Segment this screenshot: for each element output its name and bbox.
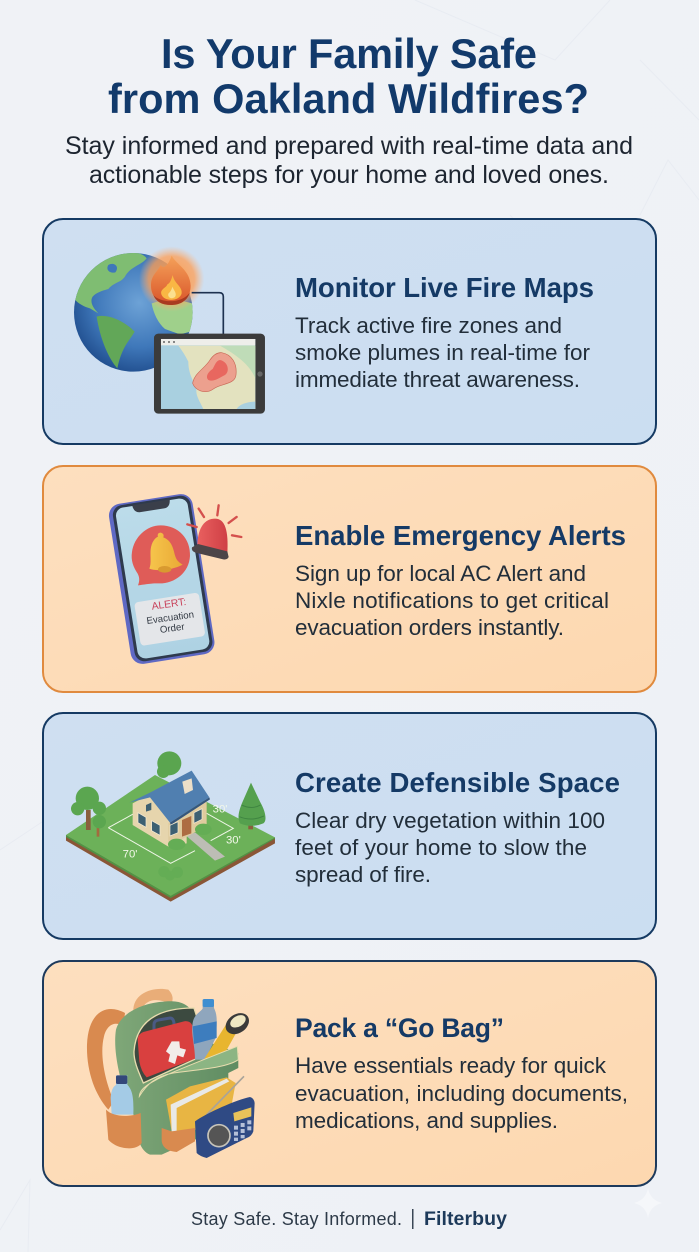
alert message text [146, 597, 195, 636]
body text: spread of fire. [295, 862, 431, 887]
body text [295, 561, 609, 640]
panel: monitor live fire maps [43, 219, 656, 444]
footer: Filterbuy [424, 1208, 507, 1230]
title: Is Your Family Safe [161, 30, 537, 77]
subtitle [65, 132, 633, 189]
subtitle: Stay informed and prepared with real-time data and [65, 132, 633, 160]
body text: feet of your home to slow the [295, 835, 587, 860]
body text: Have essentials ready for quick [295, 1053, 607, 1078]
footer: Stay Safe. Stay Informed. [191, 1209, 402, 1229]
heading: Create Defensible Space [295, 767, 620, 798]
heading: Enable Emergency Alerts [295, 520, 626, 551]
icon: backpack with emergency supplies [87, 989, 255, 1158]
body text: evacuation, including documents, [295, 1081, 628, 1106]
footer [191, 1208, 507, 1230]
body text: Sign up for local AC Alert and [295, 561, 586, 586]
measurement labels [123, 803, 241, 860]
body text: medications, and supplies. [295, 1108, 558, 1133]
body text: Track active fire zones and [295, 313, 562, 338]
alert message text: ALERT: [151, 597, 187, 613]
body text: smoke plumes in real-time for [295, 340, 590, 365]
measurement labels: 30' [226, 835, 241, 847]
subtitle: actionable steps for your home and loved ones. [89, 161, 609, 189]
body text: immediate threat awareness. [295, 367, 580, 392]
title [108, 30, 589, 122]
measurement labels: 30' [213, 803, 227, 815]
panel: create defensible space [43, 713, 656, 939]
icon: smartphone with bell alert and siren [107, 492, 241, 666]
panel: pack a go bag [43, 961, 656, 1186]
heading: Pack a “Go Bag” [295, 1013, 504, 1043]
body text: Nixle notifications to get critical [295, 588, 609, 613]
title: from Oakland Wildfires? [108, 75, 589, 122]
body text: Clear dry vegetation within 100 [295, 808, 605, 833]
alert message text: Order [159, 622, 186, 636]
alert message text: Evacuation [146, 609, 195, 627]
body text [295, 808, 605, 887]
body text [295, 313, 590, 392]
measurement labels: 70' [123, 848, 137, 860]
icon: globe with flame linked to tablet map [73, 246, 265, 414]
heading: Monitor Live Fire Maps [295, 272, 594, 303]
body text [295, 1053, 628, 1133]
icon: isometric house with defensible space zones [66, 751, 275, 902]
panel: enable emergency alerts [43, 466, 656, 692]
body text: evacuation orders instantly. [295, 615, 564, 640]
